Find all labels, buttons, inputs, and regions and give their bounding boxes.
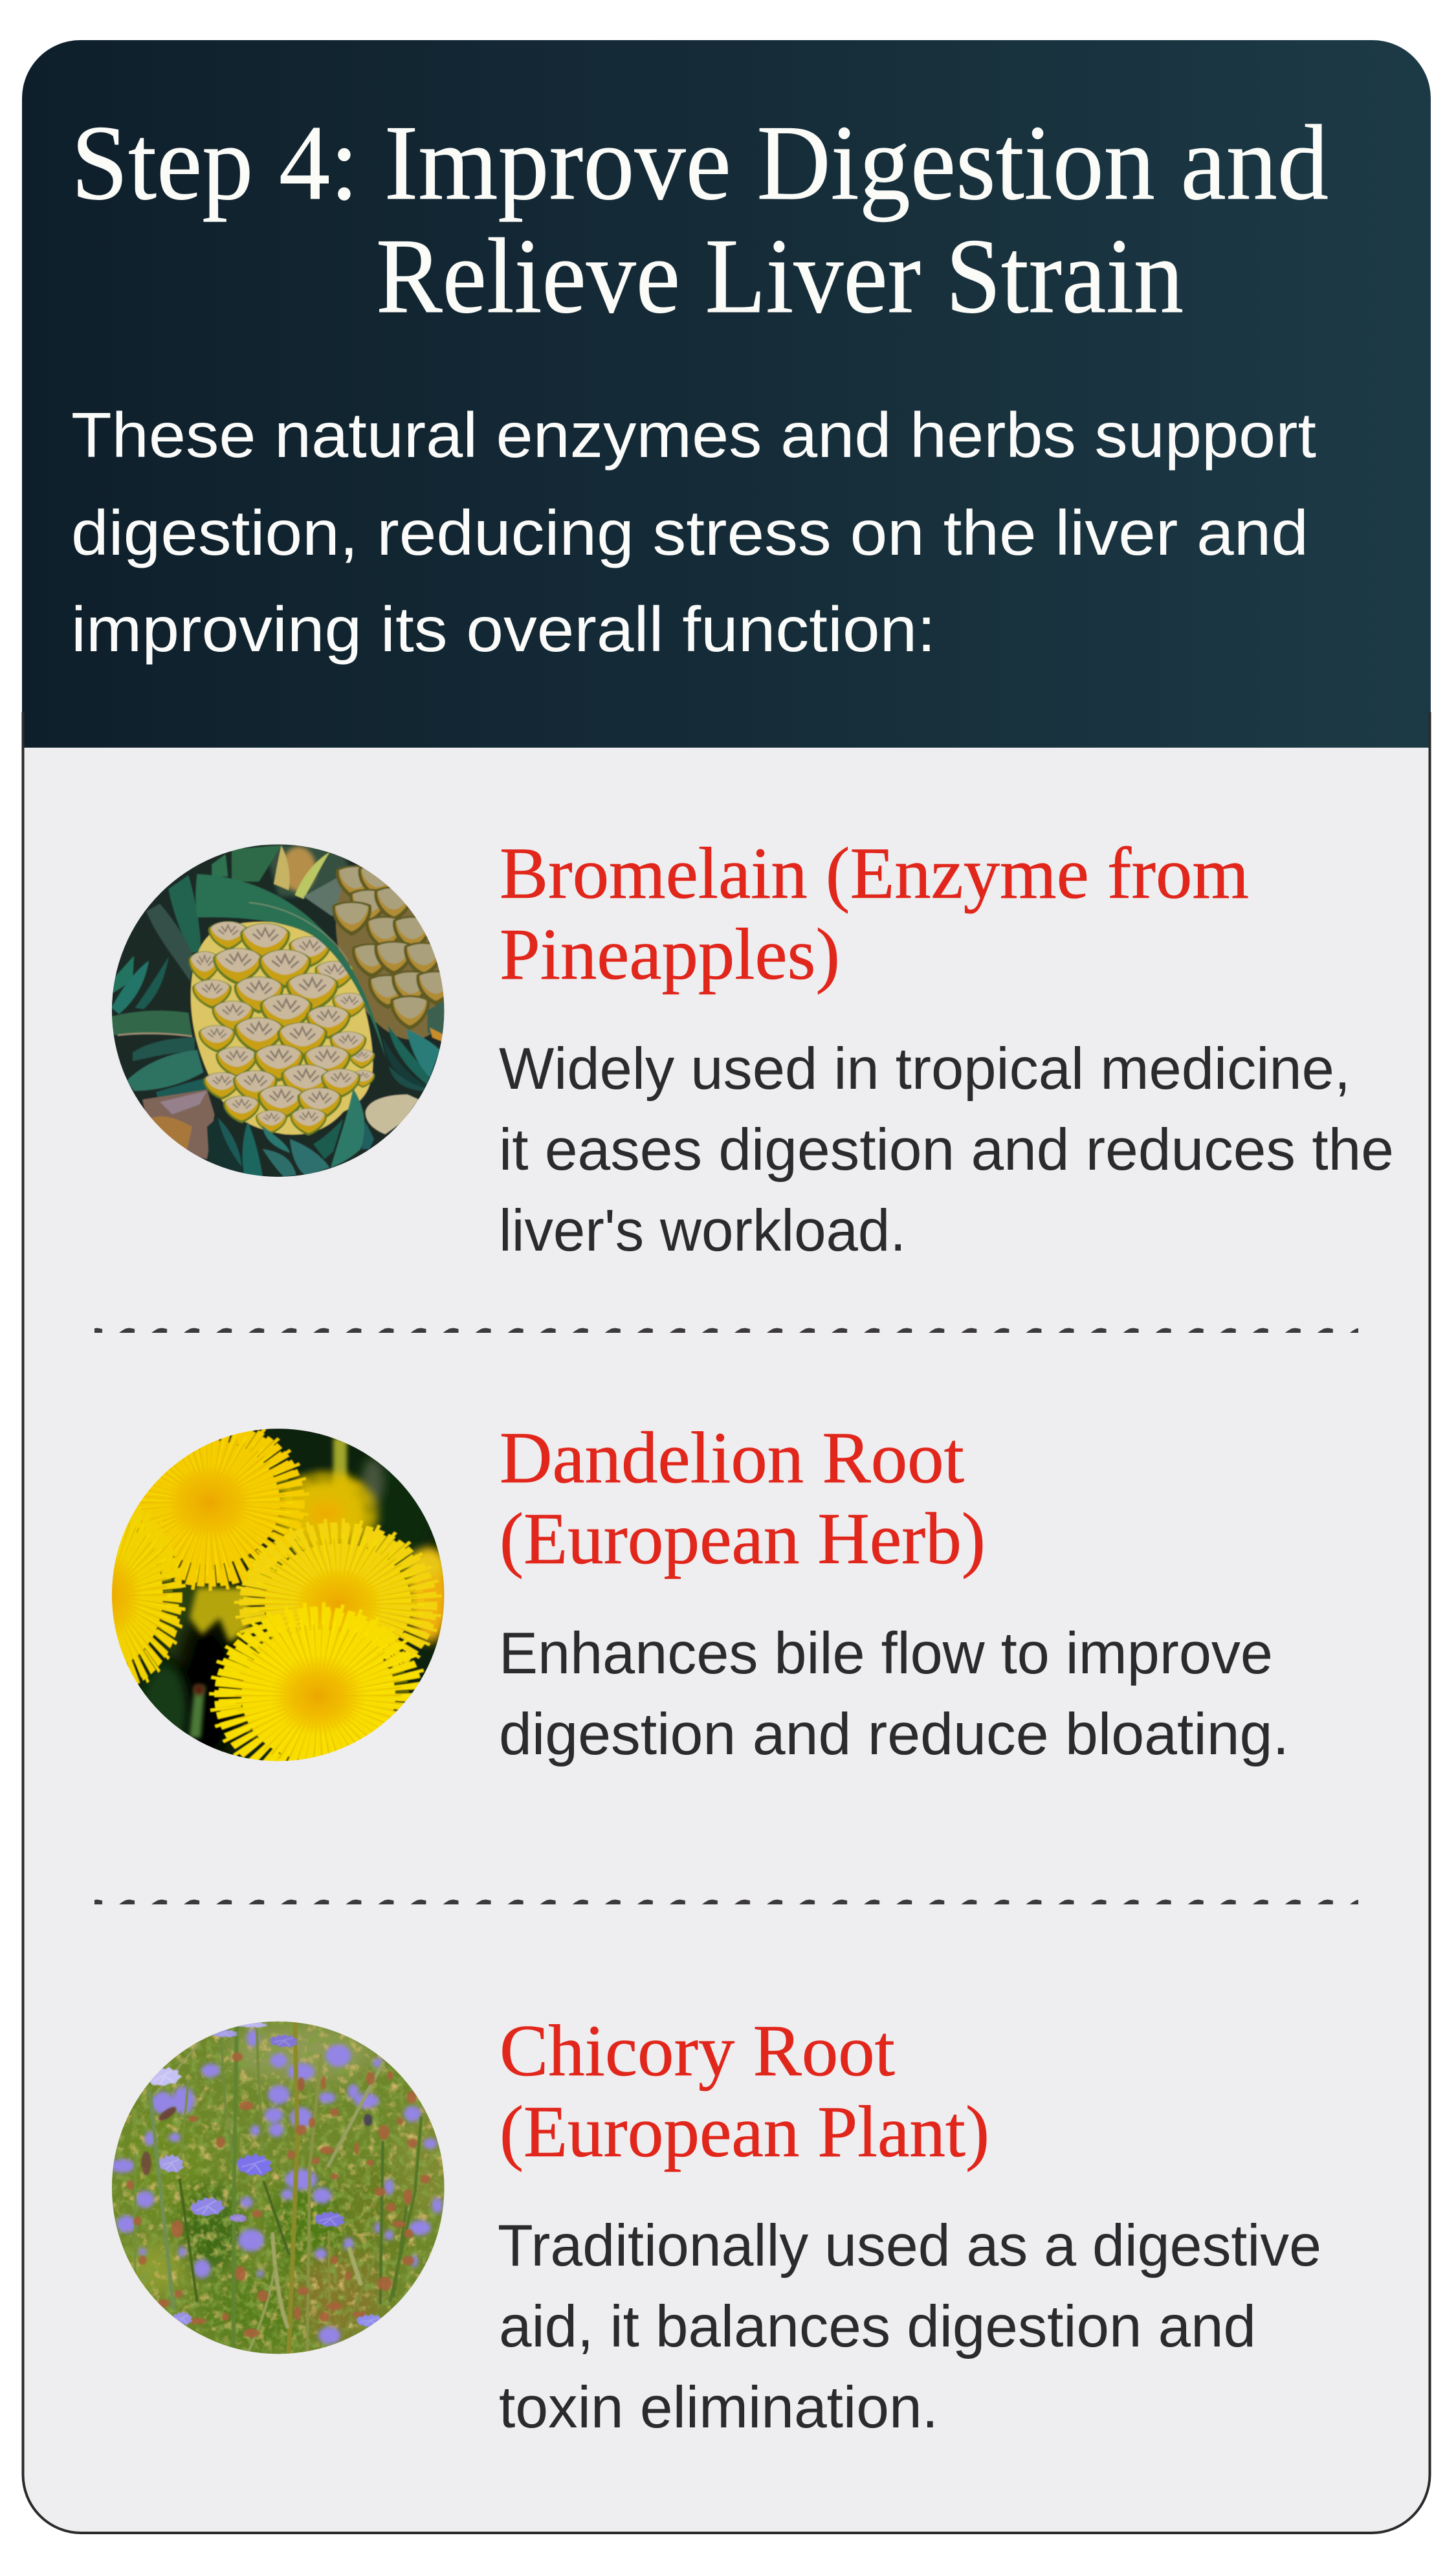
text: bromelain description: Widely used in tropical medicine,	[499, 1036, 1351, 1102]
title: Relieve Liver Strain	[376, 216, 1184, 335]
seed buds	[127, 2053, 430, 2337]
blurred purple blooms	[111, 2029, 443, 2344]
icon: chicory photo	[105, 2016, 454, 2363]
text: bromelain description: it eases digestion and reduces the	[499, 1117, 1394, 1183]
heading: bromelain	[500, 833, 1249, 995]
intro text: digestion, reducing stress on the liver and	[71, 497, 1308, 568]
heading: bromelain: Bromelain (Enzyme from	[500, 833, 1249, 914]
heading: chicory: Chicory Root	[500, 2011, 895, 2091]
text: dandelion description	[499, 1621, 1289, 1767]
heading: chicory	[500, 2011, 989, 2172]
intro text: improving its overall function:	[71, 594, 936, 665]
sharp chicory flowers	[144, 2022, 385, 2328]
text: chicory description	[498, 2213, 1321, 2440]
text: dandelion description: digestion and reduce bloating.	[499, 1702, 1289, 1767]
icon: pineapple photo	[111, 844, 444, 1177]
heading: dandelion	[500, 1418, 986, 1579]
panel: card outline	[23, 712, 1430, 2533]
panel: header	[22, 40, 1431, 748]
heading: dandelion: Dandelion Root	[500, 1418, 964, 1499]
title	[71, 103, 1329, 335]
section 2: dandelion	[111, 1429, 1284, 1767]
intro text: These natural enzymes and herbs support	[71, 399, 1316, 471]
text: bromelain description: liver's workload.	[499, 1198, 906, 1264]
intro text	[71, 399, 1316, 665]
text: chicory description: toxin elimination.	[499, 2375, 938, 2440]
text: chicory description: aid, it balances digestion and	[499, 2294, 1256, 2359]
title: Step 4: Improve Digestion and	[71, 103, 1329, 222]
stems	[135, 2023, 421, 2353]
section 3: chicory	[105, 2011, 1321, 2440]
text: bromelain description	[499, 1036, 1394, 1264]
heading: bromelain: Pineapples)	[500, 914, 840, 995]
section 1: bromelain	[105, 833, 1394, 1264]
panel: card body	[23, 647, 1430, 2533]
heading: chicory: (European Plant)	[500, 2091, 989, 2172]
text: dandelion description: Enhances bile flow to improve	[499, 1621, 1273, 1686]
heading: dandelion: (European Herb)	[500, 1499, 986, 1579]
icon: dandelion photo	[111, 1429, 444, 1761]
text: chicory description: Traditionally used as a digestive	[498, 2213, 1321, 2279]
